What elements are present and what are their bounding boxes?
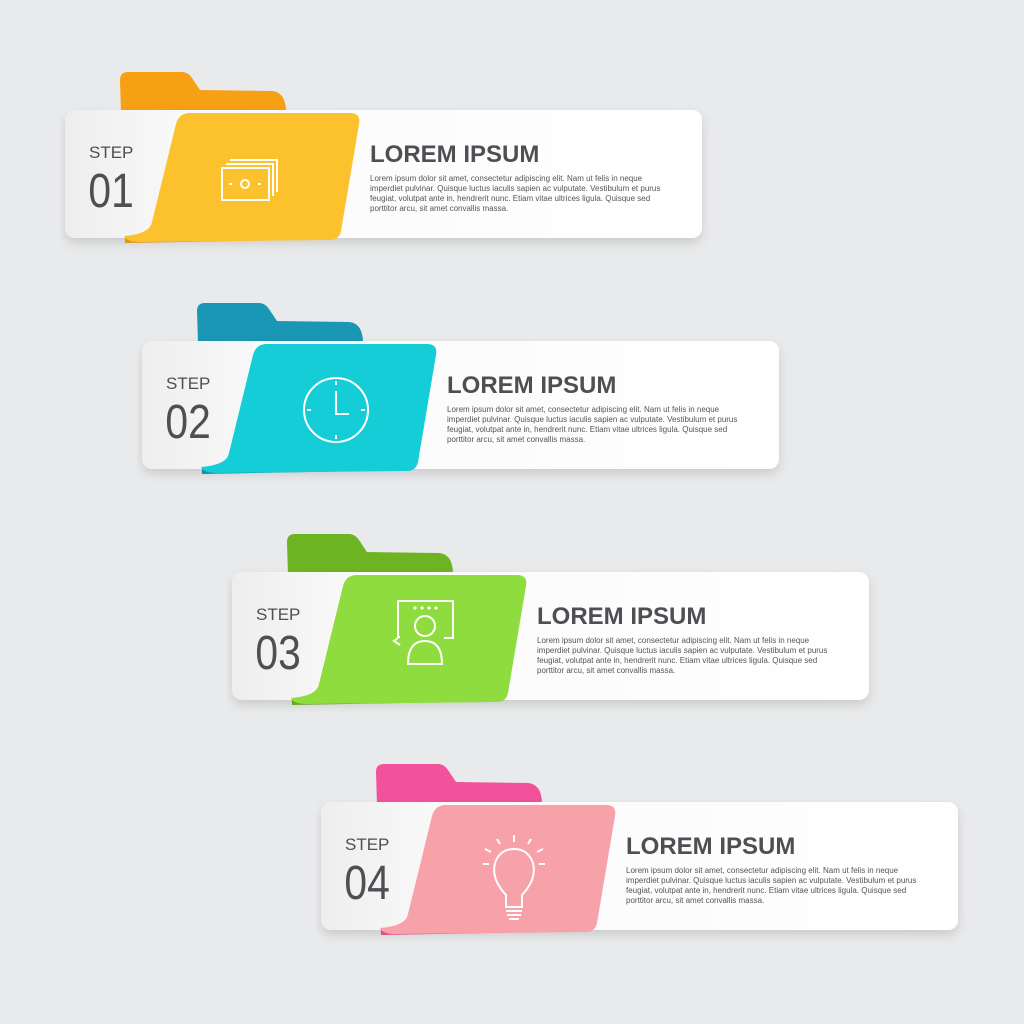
step label: STEP [345, 835, 389, 854]
body text: imperdiet pulvinar. Quisque luctus iaculis sapien ac vulputate. Vestibulum et purus [626, 876, 916, 885]
step label: 03 [255, 627, 301, 680]
white card [65, 110, 702, 238]
front folder [291, 575, 526, 704]
body text: porttitor arcu, sit amet convallis massa. [537, 666, 675, 675]
body text: porttitor arcu, sit amet convallis massa. [370, 204, 508, 213]
folder back tab [287, 534, 453, 705]
white card [321, 802, 958, 930]
body text: Lorem ipsum dolor sit amet, consectetur adipiscing elit. Nam ut felis in neque [370, 174, 643, 183]
title: LOREM IPSUM [537, 603, 706, 630]
body text: porttitor arcu, sit amet convallis massa. [447, 435, 585, 444]
title: LOREM IPSUM [447, 372, 616, 399]
body text: feugiat, volutpat ante in, hendrerit nunc. Etiam vitae ultrices ligula. Quisque sed [537, 656, 817, 665]
step label: 02 [165, 396, 211, 449]
step 2 panel [139, 303, 782, 477]
step 4 panel [318, 764, 961, 938]
step 1 panel [62, 72, 705, 246]
icon: money [222, 160, 277, 200]
front folder [201, 344, 436, 473]
step label: STEP [256, 605, 300, 624]
body text: feugiat, volutpat ante in, hendrerit nunc. Etiam vitae ultrices ligula. Quisque sed [626, 886, 906, 895]
body text: Lorem ipsum dolor sit amet, consectetur adipiscing elit. Nam ut felis in neque [537, 636, 810, 645]
white card [232, 572, 869, 700]
step label: 04 [344, 857, 390, 910]
body text: feugiat, volutpat ante in, hendrerit nunc. Etiam vitae ultrices ligula. Quisque sed [370, 194, 650, 203]
step 3 panel [229, 534, 872, 708]
icon: clock [304, 378, 368, 442]
body text: imperdiet pulvinar. Quisque luctus iaculis sapien ac vulputate. Vestibulum et purus [370, 184, 660, 193]
body text [626, 866, 916, 905]
folder back tab [120, 72, 286, 243]
icon: person speech [394, 601, 453, 664]
icon: light bulb [483, 835, 545, 919]
body text [447, 405, 737, 444]
folder back tab [197, 303, 363, 474]
title: LOREM IPSUM [626, 833, 795, 860]
body text: imperdiet pulvinar. Quisque luctus iaculis sapien ac vulputate. Vestibulum et purus [537, 646, 827, 655]
white card [142, 341, 779, 469]
step label: STEP [166, 374, 210, 393]
body text [370, 174, 660, 213]
body text: imperdiet pulvinar. Quisque luctus iaculis sapien ac vulputate. Vestibulum et purus [447, 415, 737, 424]
title: LOREM IPSUM [370, 141, 539, 168]
front folder [380, 805, 615, 934]
step label: STEP [89, 143, 133, 162]
folder back tab [376, 764, 542, 935]
step label: 01 [88, 165, 134, 218]
front folder [124, 113, 359, 242]
body text [537, 636, 827, 675]
body text: feugiat, volutpat ante in, hendrerit nunc. Etiam vitae ultrices ligula. Quisque sed [447, 425, 727, 434]
body text: Lorem ipsum dolor sit amet, consectetur adipiscing elit. Nam ut felis in neque [626, 866, 899, 875]
body text: porttitor arcu, sit amet convallis massa. [626, 896, 764, 905]
body text: Lorem ipsum dolor sit amet, consectetur adipiscing elit. Nam ut felis in neque [447, 405, 720, 414]
